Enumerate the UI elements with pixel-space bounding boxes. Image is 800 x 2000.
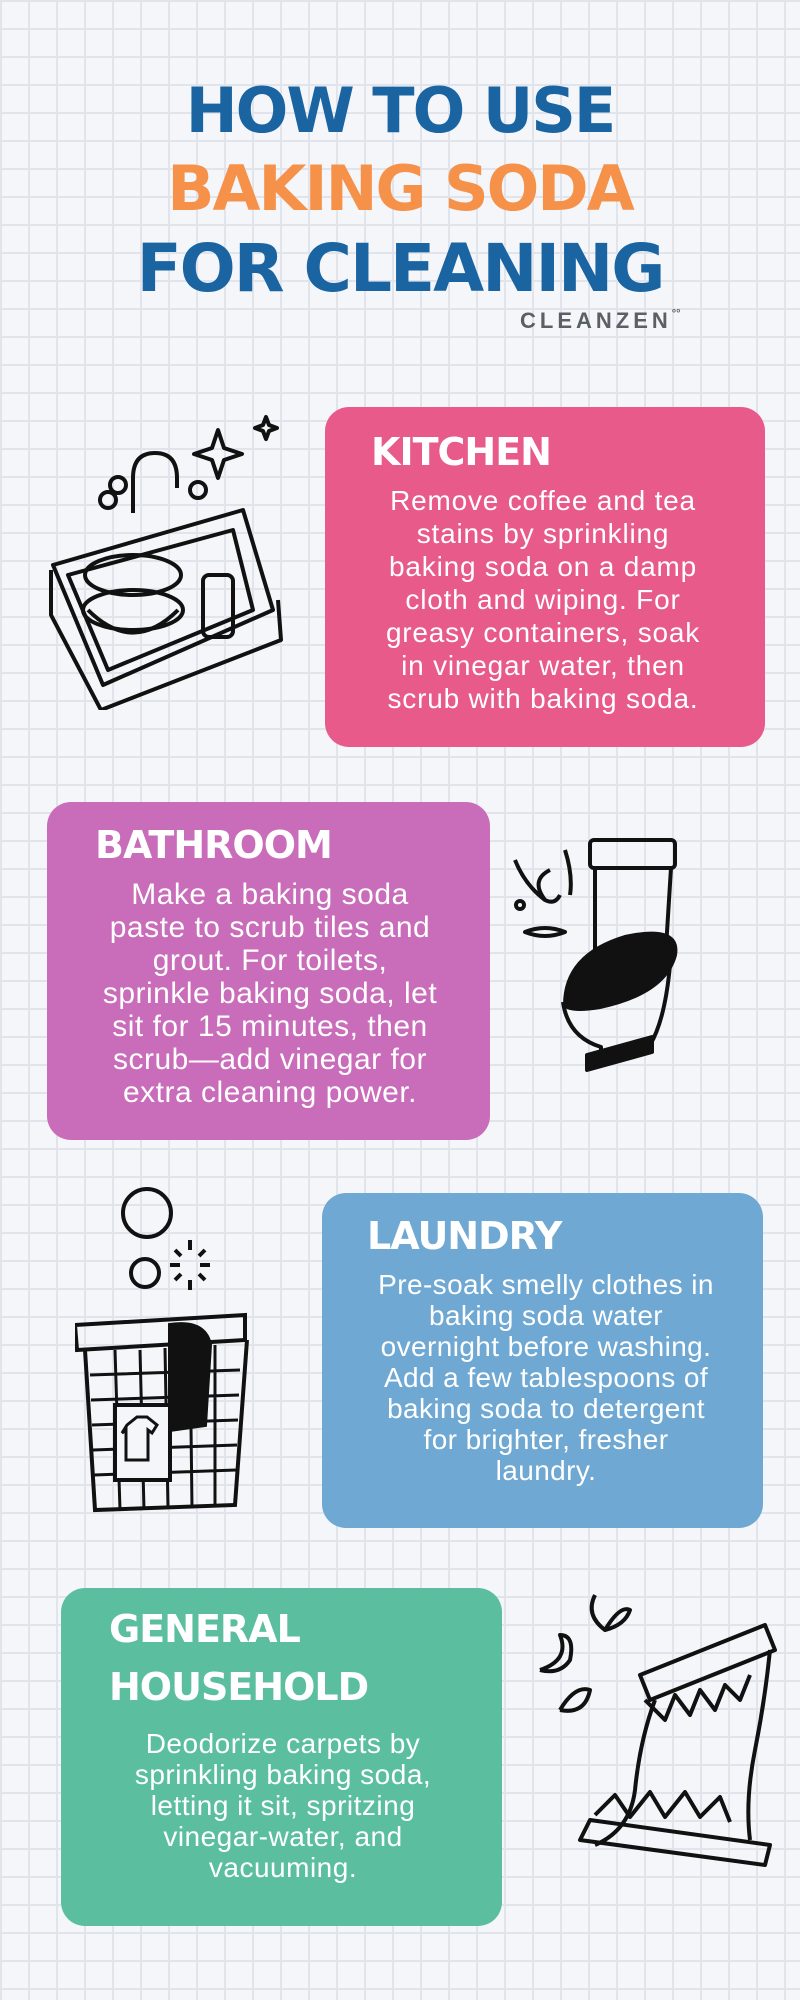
text: kitchen tips: [386, 485, 700, 714]
icon: laundry basket with bubbles: [75, 1187, 249, 1512]
text: general household tips: vacuuming.: [209, 1852, 357, 1883]
panel: bathroom: [47, 802, 490, 1140]
text: kitchen tips: in vinegar water, then: [401, 650, 685, 681]
brand logo: CLEANZEN°°: [520, 308, 681, 333]
panel: laundry: [322, 1193, 763, 1528]
icon: rug with leaves: [539, 1594, 778, 1867]
text: general household tips: [135, 1728, 431, 1883]
text: kitchen tips: cloth and wiping. For: [405, 584, 681, 615]
text: general household tips: sprinkling baking soda,: [135, 1759, 431, 1790]
text: bathroom tips: sit for 15 minutes, then: [112, 1010, 428, 1043]
text: laundry tips: for brighter, fresher: [424, 1424, 668, 1455]
text: laundry tips: laundry.: [496, 1455, 596, 1486]
heading: laundry: LAUNDRY: [367, 1214, 561, 1258]
text: bathroom tips: paste to scrub tiles and: [110, 911, 430, 944]
text: laundry tips: baking soda to detergent: [387, 1393, 705, 1424]
icon: toilet: [513, 838, 678, 1072]
text: laundry tips: Add a few tablespoons of: [384, 1362, 708, 1393]
heading: kitchen: KITCHEN: [371, 430, 551, 474]
text: bathroom tips: sprinkle baking soda, let: [103, 977, 437, 1010]
text: bathroom tips: grout. For toilets,: [153, 944, 387, 977]
text: laundry tips: [378, 1269, 714, 1486]
panel: general household: [61, 1588, 502, 1926]
title line 2: BAKING SODA: [167, 152, 633, 225]
title line 1: HOW TO USE: [186, 74, 614, 147]
text: kitchen tips: greasy containers, soak: [386, 617, 700, 648]
text: bathroom tips: scrub—add vinegar for: [113, 1043, 427, 1076]
title: [137, 74, 663, 307]
text: kitchen tips: baking soda on a damp: [389, 551, 697, 582]
title line 3: FOR CLEANING: [137, 230, 663, 307]
text: general household tips: vinegar-water, and: [163, 1821, 403, 1852]
text: laundry tips: Pre-soak smelly clothes in: [378, 1269, 714, 1300]
heading: general household: GENERAL: [109, 1607, 300, 1651]
heading: general household: HOUSEHOLD: [109, 1665, 368, 1709]
heading: general household: [109, 1607, 368, 1709]
text: laundry tips: overnight before washing.: [381, 1331, 711, 1362]
text: bathroom tips: extra cleaning power.: [123, 1076, 417, 1109]
heading: bathroom: BATHROOM: [95, 823, 332, 867]
panel: kitchen: [325, 407, 765, 747]
text: kitchen tips: scrub with baking soda.: [387, 683, 698, 714]
text: laundry tips: baking soda water: [429, 1300, 663, 1331]
text: bathroom tips: Make a baking soda: [131, 878, 409, 911]
text: general household tips: Deodorize carpets by: [146, 1728, 420, 1759]
text: general household tips: letting it sit, spritzing: [151, 1790, 415, 1821]
icon: kitchen sink: [49, 414, 283, 710]
text: kitchen tips: Remove coffee and tea: [390, 485, 696, 516]
text: bathroom tips: [103, 878, 437, 1109]
text: kitchen tips: stains by sprinkling: [417, 518, 669, 549]
